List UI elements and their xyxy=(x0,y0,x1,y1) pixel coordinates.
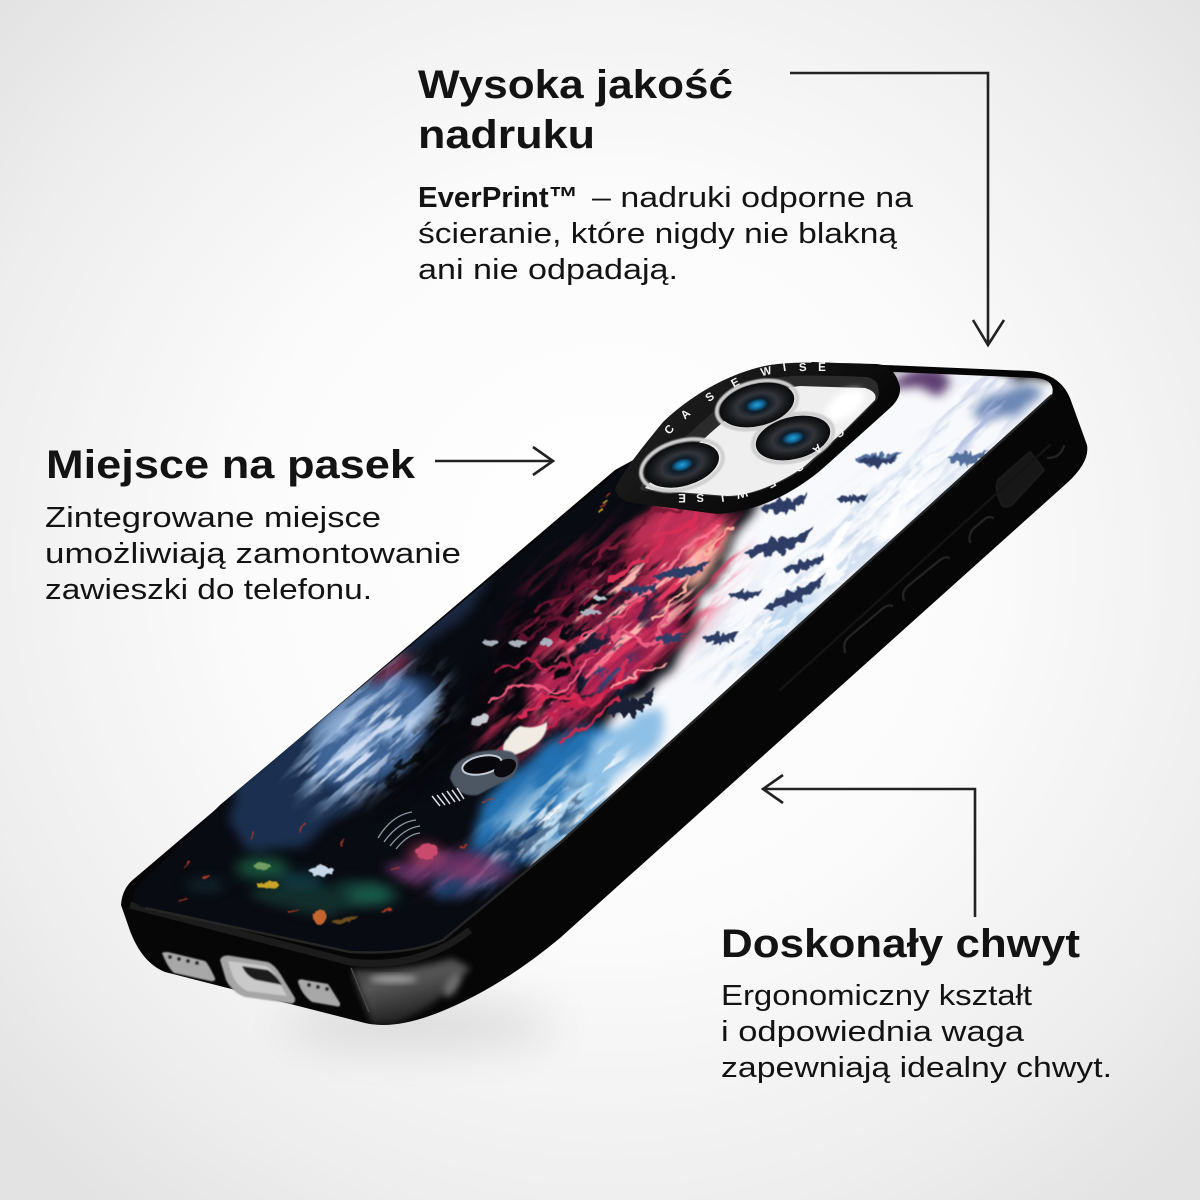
body: print quality: EverPrint™ xyxy=(418,182,578,214)
text block: grip xyxy=(721,922,1112,1084)
heading: strap slot: Miejsce na pasek xyxy=(46,443,416,487)
small skulls xyxy=(469,595,607,729)
diagonal paint strokes: dark xyxy=(360,452,950,881)
lens highlight xyxy=(820,383,870,427)
panel rim highlight xyxy=(145,395,1052,952)
body: grip xyxy=(721,980,1112,1084)
ring lettering: I xyxy=(782,362,787,374)
ring lettering xyxy=(663,362,846,503)
heading: print quality xyxy=(418,63,733,157)
arrow: to back panel xyxy=(790,73,1004,345)
ring lettering: A xyxy=(679,408,693,422)
charging port xyxy=(220,956,295,1003)
body: grip: zapewniają idealny chwyt. xyxy=(721,1052,1112,1084)
body: print quality: ani nie odpadają. xyxy=(418,254,678,286)
ring lettering: E xyxy=(678,491,686,503)
red flow lines xyxy=(490,508,730,745)
phone shadow xyxy=(280,1005,560,1045)
body: strap slot: Zintegrowane miejsce xyxy=(45,502,381,534)
body: strap slot: zawieszki do telefonu. xyxy=(45,574,372,606)
speaker left xyxy=(162,952,215,981)
ring lettering: E xyxy=(765,476,778,490)
body: strap slot: umożliwiają zamontowanie xyxy=(45,538,461,570)
lower colour flecks xyxy=(185,845,514,904)
speaker right xyxy=(298,979,340,1007)
heading: grip: Doskonały chwyt xyxy=(721,922,1080,966)
body: grip: i odpowiednia waga xyxy=(721,1016,1025,1048)
ring lettering: S xyxy=(792,459,805,474)
glossy bottom corner xyxy=(130,905,470,1024)
heading: print quality: nadruku xyxy=(418,113,595,157)
side buttons xyxy=(780,445,1064,690)
back panel artwork xyxy=(134,372,1053,951)
lenses xyxy=(635,373,838,500)
ring lettering: E xyxy=(729,376,742,390)
phone case xyxy=(121,362,1088,1025)
bats xyxy=(603,450,988,725)
ring lettering: A xyxy=(810,441,824,456)
body: print quality xyxy=(418,182,914,286)
ring inner wall xyxy=(640,376,879,497)
ring lettering: C xyxy=(832,425,846,439)
ring lettering: S xyxy=(696,491,704,503)
text block: print quality xyxy=(418,63,914,286)
diagonal paint strokes: main xyxy=(283,376,1020,901)
camera bump xyxy=(615,362,900,514)
ring lettering: W xyxy=(735,486,749,500)
ring lettering: S xyxy=(799,362,807,374)
arrow: to camera xyxy=(435,447,553,475)
skull xyxy=(378,722,547,849)
camera glass xyxy=(645,386,876,496)
ring lettering: S xyxy=(704,390,717,405)
text block: strap slot xyxy=(45,443,461,606)
body: grip: Ergonomiczny kształt xyxy=(721,980,1032,1012)
camera ring xyxy=(615,363,900,514)
arrow: to case side xyxy=(763,775,975,917)
ring lettering: C xyxy=(663,423,677,437)
ring lettering: W xyxy=(760,365,773,379)
case body xyxy=(121,362,1087,1025)
bright flecks xyxy=(178,494,611,925)
ring lettering: I xyxy=(720,491,725,503)
body: print quality: ścieranie, które nigdy nie blakną xyxy=(418,218,898,250)
bottom ports xyxy=(162,952,340,1007)
broad colour areas xyxy=(206,360,1070,909)
diagonal paint strokes: highlights xyxy=(294,524,722,865)
heading: print quality: Wysoka jakość xyxy=(418,63,733,107)
body: strap slot xyxy=(45,502,461,606)
body: print quality: – nadruki odporne na xyxy=(592,182,914,214)
ring lettering: E xyxy=(818,362,826,374)
